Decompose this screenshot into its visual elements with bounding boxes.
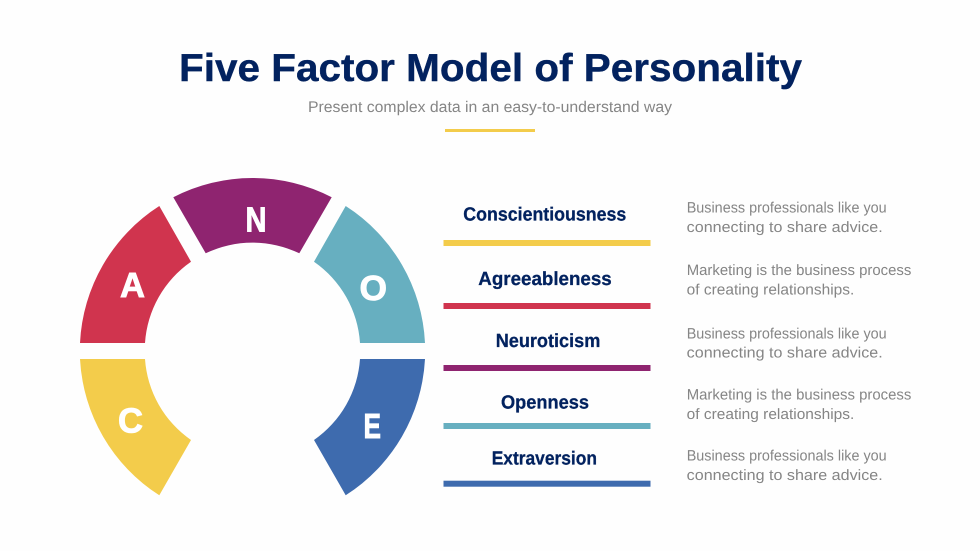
- subtitle: Present complex data in an easy-to-understand way: [308, 99, 672, 116]
- row: Agreeableness: Agreeableness: [478, 269, 612, 290]
- row: Agreeableness: Marketing is the business process: [687, 262, 911, 279]
- row: Openness: of creating relationships.: [687, 406, 854, 423]
- row: Conscientiousness: Conscientiousness: [463, 204, 626, 226]
- title: Five Factor Model of Personality: [179, 47, 802, 90]
- row: Conscientiousness: Business professionals like you: [687, 200, 887, 217]
- segment: A (Agreeableness): A: [120, 266, 145, 305]
- row: Openness: Marketing is the business process: [687, 387, 911, 404]
- row: Neuroticism: Neuroticism: [496, 331, 600, 352]
- row: Extraversion: Extraversion: [492, 448, 597, 469]
- segment: E (Extraversion): [314, 359, 425, 495]
- row: Openness: [444, 387, 911, 429]
- row: Neuroticism: connecting to share advice.: [687, 345, 883, 362]
- title underline accent: [445, 129, 535, 132]
- row: Agreeableness: [444, 262, 911, 309]
- segment: A (Agreeableness): [80, 206, 191, 343]
- segment: O (Openness): [314, 206, 425, 343]
- segment: N (Neuroticism): [173, 178, 332, 253]
- row: Conscientiousness: [444, 200, 887, 246]
- segment: E (Extraversion): E: [364, 407, 381, 446]
- row: Neuroticism: [444, 325, 887, 371]
- row: Neuroticism: Business professionals like you: [687, 325, 887, 342]
- row: Extraversion: Business professionals like you: [687, 448, 887, 465]
- row: Extraversion: [444, 448, 887, 487]
- row: Conscientiousness: connecting to share advice.: [687, 219, 883, 236]
- segment: C (Conscientiousness): [80, 359, 191, 495]
- horseshoe diagram: [80, 178, 425, 495]
- row: Openness: Openness: [501, 393, 589, 414]
- segment: C (Conscientiousness): C: [118, 402, 143, 440]
- segment: N (Neuroticism): N: [246, 200, 266, 240]
- segment: O (Openness): O: [360, 269, 387, 308]
- row: Agreeableness: of creating relationships.: [687, 281, 854, 298]
- row: Extraversion: connecting to share advice.: [687, 467, 883, 484]
